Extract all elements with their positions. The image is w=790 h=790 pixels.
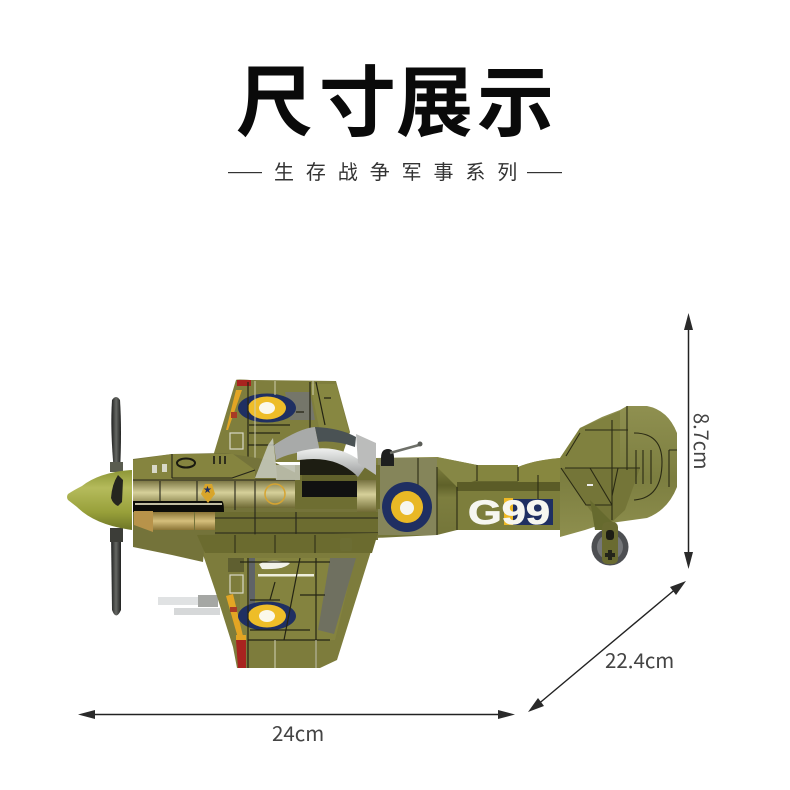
depth arrow	[528, 581, 686, 712]
lower wing	[197, 533, 377, 668]
upper wing	[214, 380, 350, 462]
title: 寸	[319, 61, 396, 147]
airplane model	[67, 380, 677, 668]
title: 示	[477, 61, 554, 147]
subtitle: 生存战争军事系列	[274, 161, 529, 184]
height label: 8.7cm	[688, 413, 717, 469]
title	[236, 61, 554, 147]
front fuselage: ★	[203, 485, 212, 496]
propeller	[110, 397, 123, 616]
tail	[560, 406, 677, 537]
cockpit canopy and armor	[255, 427, 376, 480]
G99 decal: G99	[468, 494, 550, 532]
depth label: 22.4cm	[605, 644, 674, 674]
machine gun	[381, 442, 422, 466]
title: 展	[396, 61, 473, 147]
fuselage roundel	[382, 482, 432, 532]
title: 尺	[236, 61, 313, 147]
nose spinner	[67, 470, 132, 530]
cannons	[158, 595, 220, 615]
width arrow	[78, 710, 515, 719]
front fuselage	[133, 453, 380, 562]
rear fuselage	[375, 457, 560, 538]
tail wheel	[592, 522, 628, 566]
height arrow	[684, 313, 693, 569]
width label: 24cm	[272, 717, 324, 747]
